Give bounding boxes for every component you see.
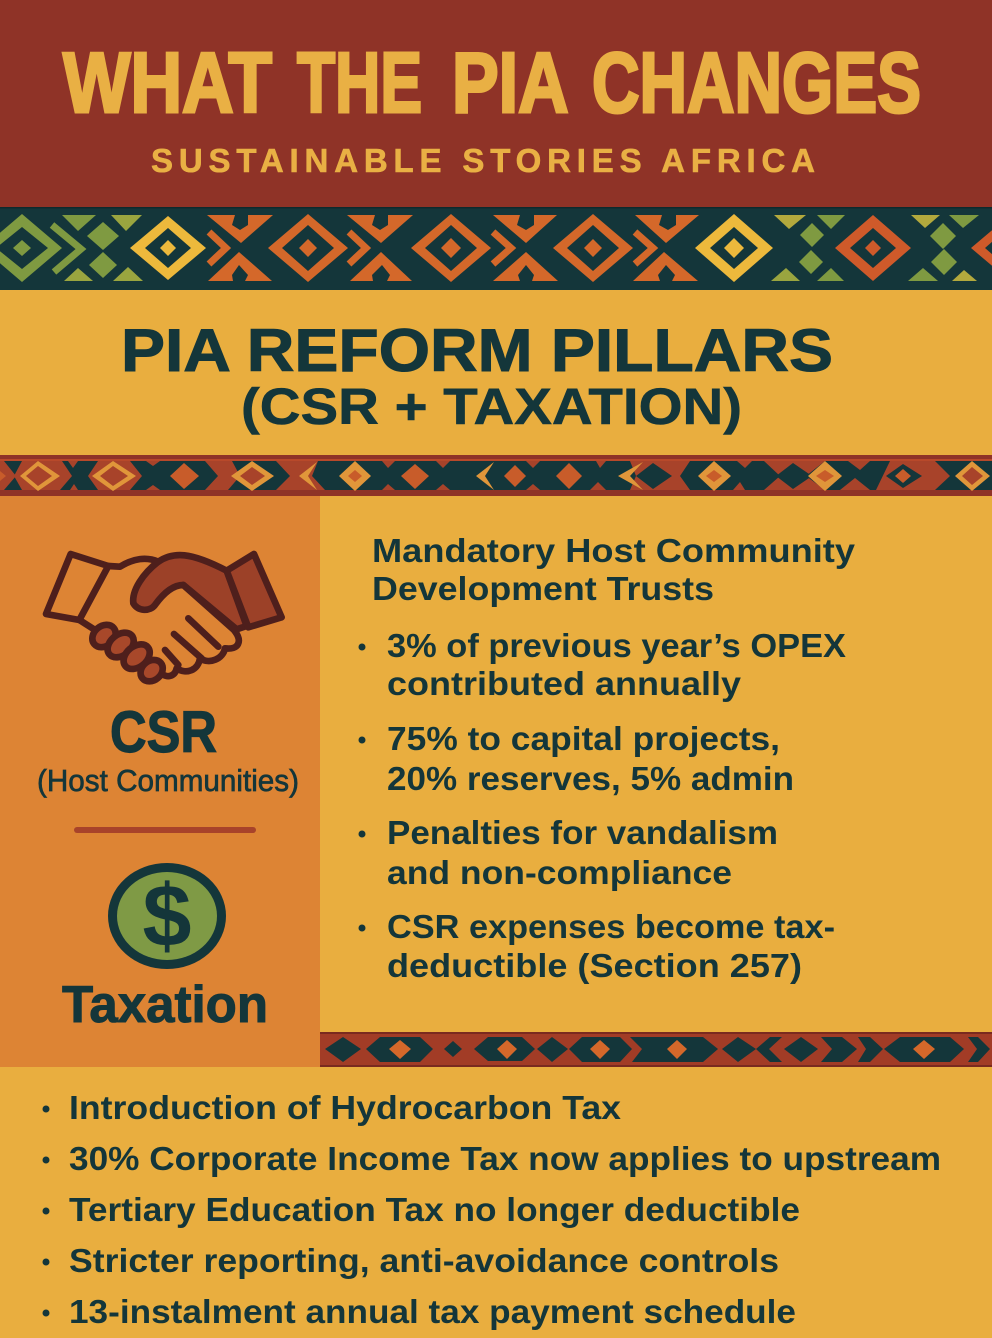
header panel — [0, 0, 992, 208]
heading line two: (CSR + TAXATION) — [241, 378, 742, 435]
bullet: deductible — [358, 908, 835, 984]
bullet: instalments: 13-instalment annual tax payment schedule — [69, 1293, 796, 1330]
title: PIA — [452, 36, 567, 131]
title: WHAT — [63, 36, 272, 131]
bullet: opex — [358, 627, 846, 702]
bullet: deductible: deductible (Section 257) — [387, 947, 802, 984]
patterned band: red with diamonds — [0, 455, 992, 496]
bullet: penalties — [358, 814, 778, 891]
icon: dollar coin: $ — [143, 866, 191, 965]
panel: CSR details — [320, 496, 992, 1033]
bullet: corporate income tax: 30% Corporate Income Tax now applies to upstream — [69, 1140, 941, 1177]
section heading panel — [0, 290, 992, 455]
bullet: reporting: Stricter reporting, anti-avoidance controls — [69, 1242, 779, 1279]
bullet: penalties: Penalties for vandalism — [387, 814, 778, 851]
panel: CSR and taxation sidebar — [0, 496, 320, 1067]
CSR label: CSR — [110, 700, 217, 765]
host communities label: (Host Communities) — [37, 763, 299, 798]
title: THE — [297, 36, 422, 131]
subtitle: SUSTAINABLE STORIES AFRICA — [151, 142, 815, 179]
bullet: penalties: and non-compliance — [387, 854, 732, 891]
bullet: allocation: 20% reserves, 5% admin — [387, 760, 794, 797]
CSR heading: Mandatory Host Community — [372, 532, 856, 569]
bullet: tertiary education tax: Tertiary Education Tax no longer deductible — [69, 1191, 800, 1228]
bullet: deductible: CSR expenses become tax- — [387, 908, 835, 945]
bullet: allocation: 75% to capital projects, — [387, 720, 780, 757]
CSR heading — [372, 532, 856, 607]
heading line one: PIA REFORM PILLARS — [121, 317, 833, 384]
icon: dollar coin — [108, 863, 226, 969]
bullet: allocation — [358, 720, 794, 797]
patterned band: teal with diamonds — [0, 207, 992, 290]
panel: taxation bullet list — [0, 1067, 992, 1338]
bullet: opex: contributed annually — [387, 665, 742, 702]
bullet: opex: 3% of previous year’s OPEX — [387, 627, 846, 664]
bullet: hydrocarbon tax: Introduction of Hydrocarbon Tax — [69, 1089, 622, 1126]
patterned band: lower red strip — [320, 1032, 992, 1067]
icon: handshake — [46, 554, 282, 686]
CSR heading: Development Trusts — [372, 570, 714, 607]
taxation label: Taxation — [62, 976, 268, 1034]
